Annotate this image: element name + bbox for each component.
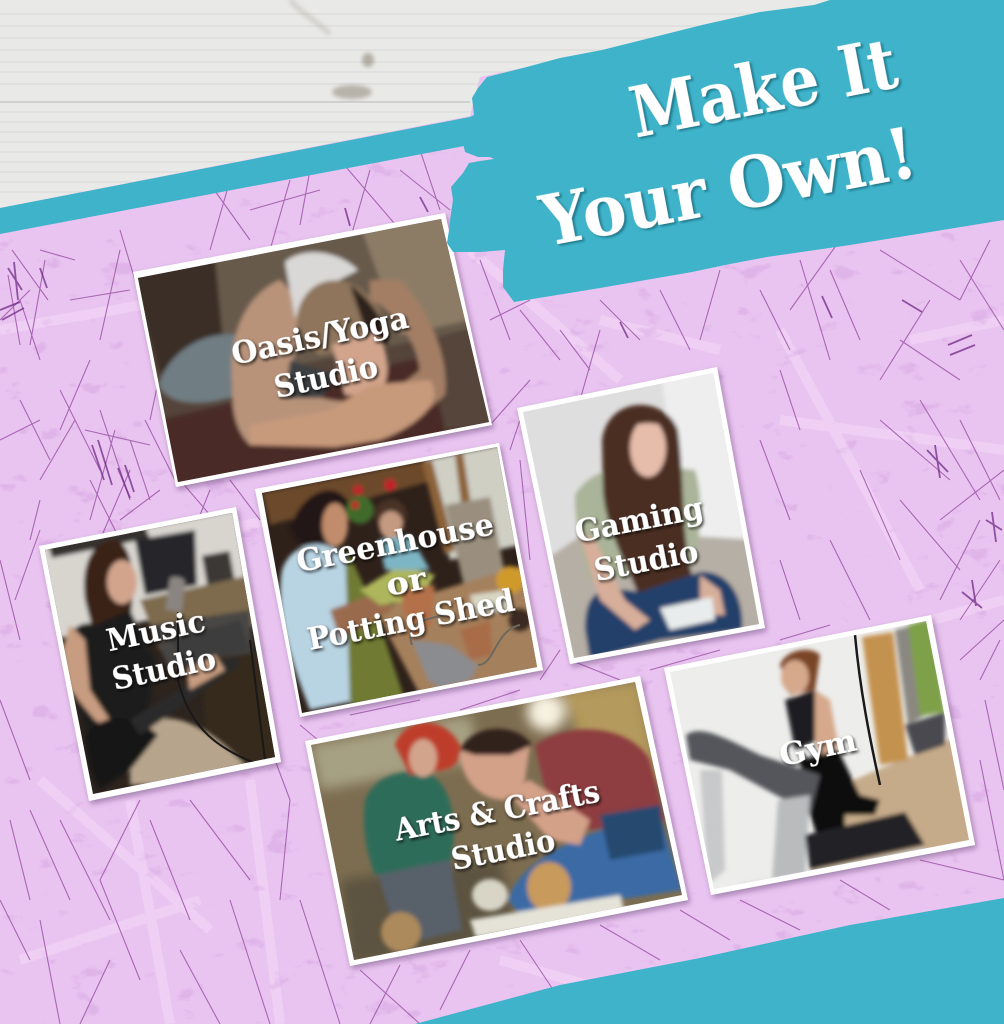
label	[293, 506, 518, 658]
teal brush banner	[447, 0, 1004, 302]
photo card: Gym	[660, 610, 980, 900]
label: Greenhouse	[293, 506, 497, 580]
photo card: Oasis/Yoga Studio	[130, 205, 500, 490]
label: Potting Shed	[305, 582, 518, 658]
label: Studio	[109, 641, 219, 698]
teal bottom band	[415, 898, 1004, 1024]
label: Studio	[591, 533, 701, 589]
label: Music	[103, 603, 209, 659]
photo card: Music Studio	[35, 505, 285, 805]
label	[572, 490, 706, 589]
title: Make It	[623, 21, 904, 154]
background: white wood boards	[0, 0, 840, 208]
label	[103, 603, 219, 698]
label: Oasis/Yoga	[228, 300, 412, 373]
photo card: Gaming Studio	[515, 365, 770, 670]
label: Gaming	[572, 490, 706, 550]
photo card: Arts & Crafts Studio	[300, 675, 695, 970]
title	[533, 21, 923, 263]
teal diagonal band	[0, 115, 480, 234]
label: Studio	[271, 349, 381, 406]
label: or	[383, 561, 430, 604]
label: Arts & Crafts	[391, 774, 603, 849]
label	[391, 774, 603, 878]
label	[228, 300, 412, 406]
title: Your Own!	[533, 111, 923, 263]
label: Studio	[448, 822, 558, 878]
photo card: Greenhouse or Potting Shed	[255, 440, 545, 720]
label: Gym	[776, 722, 860, 774]
